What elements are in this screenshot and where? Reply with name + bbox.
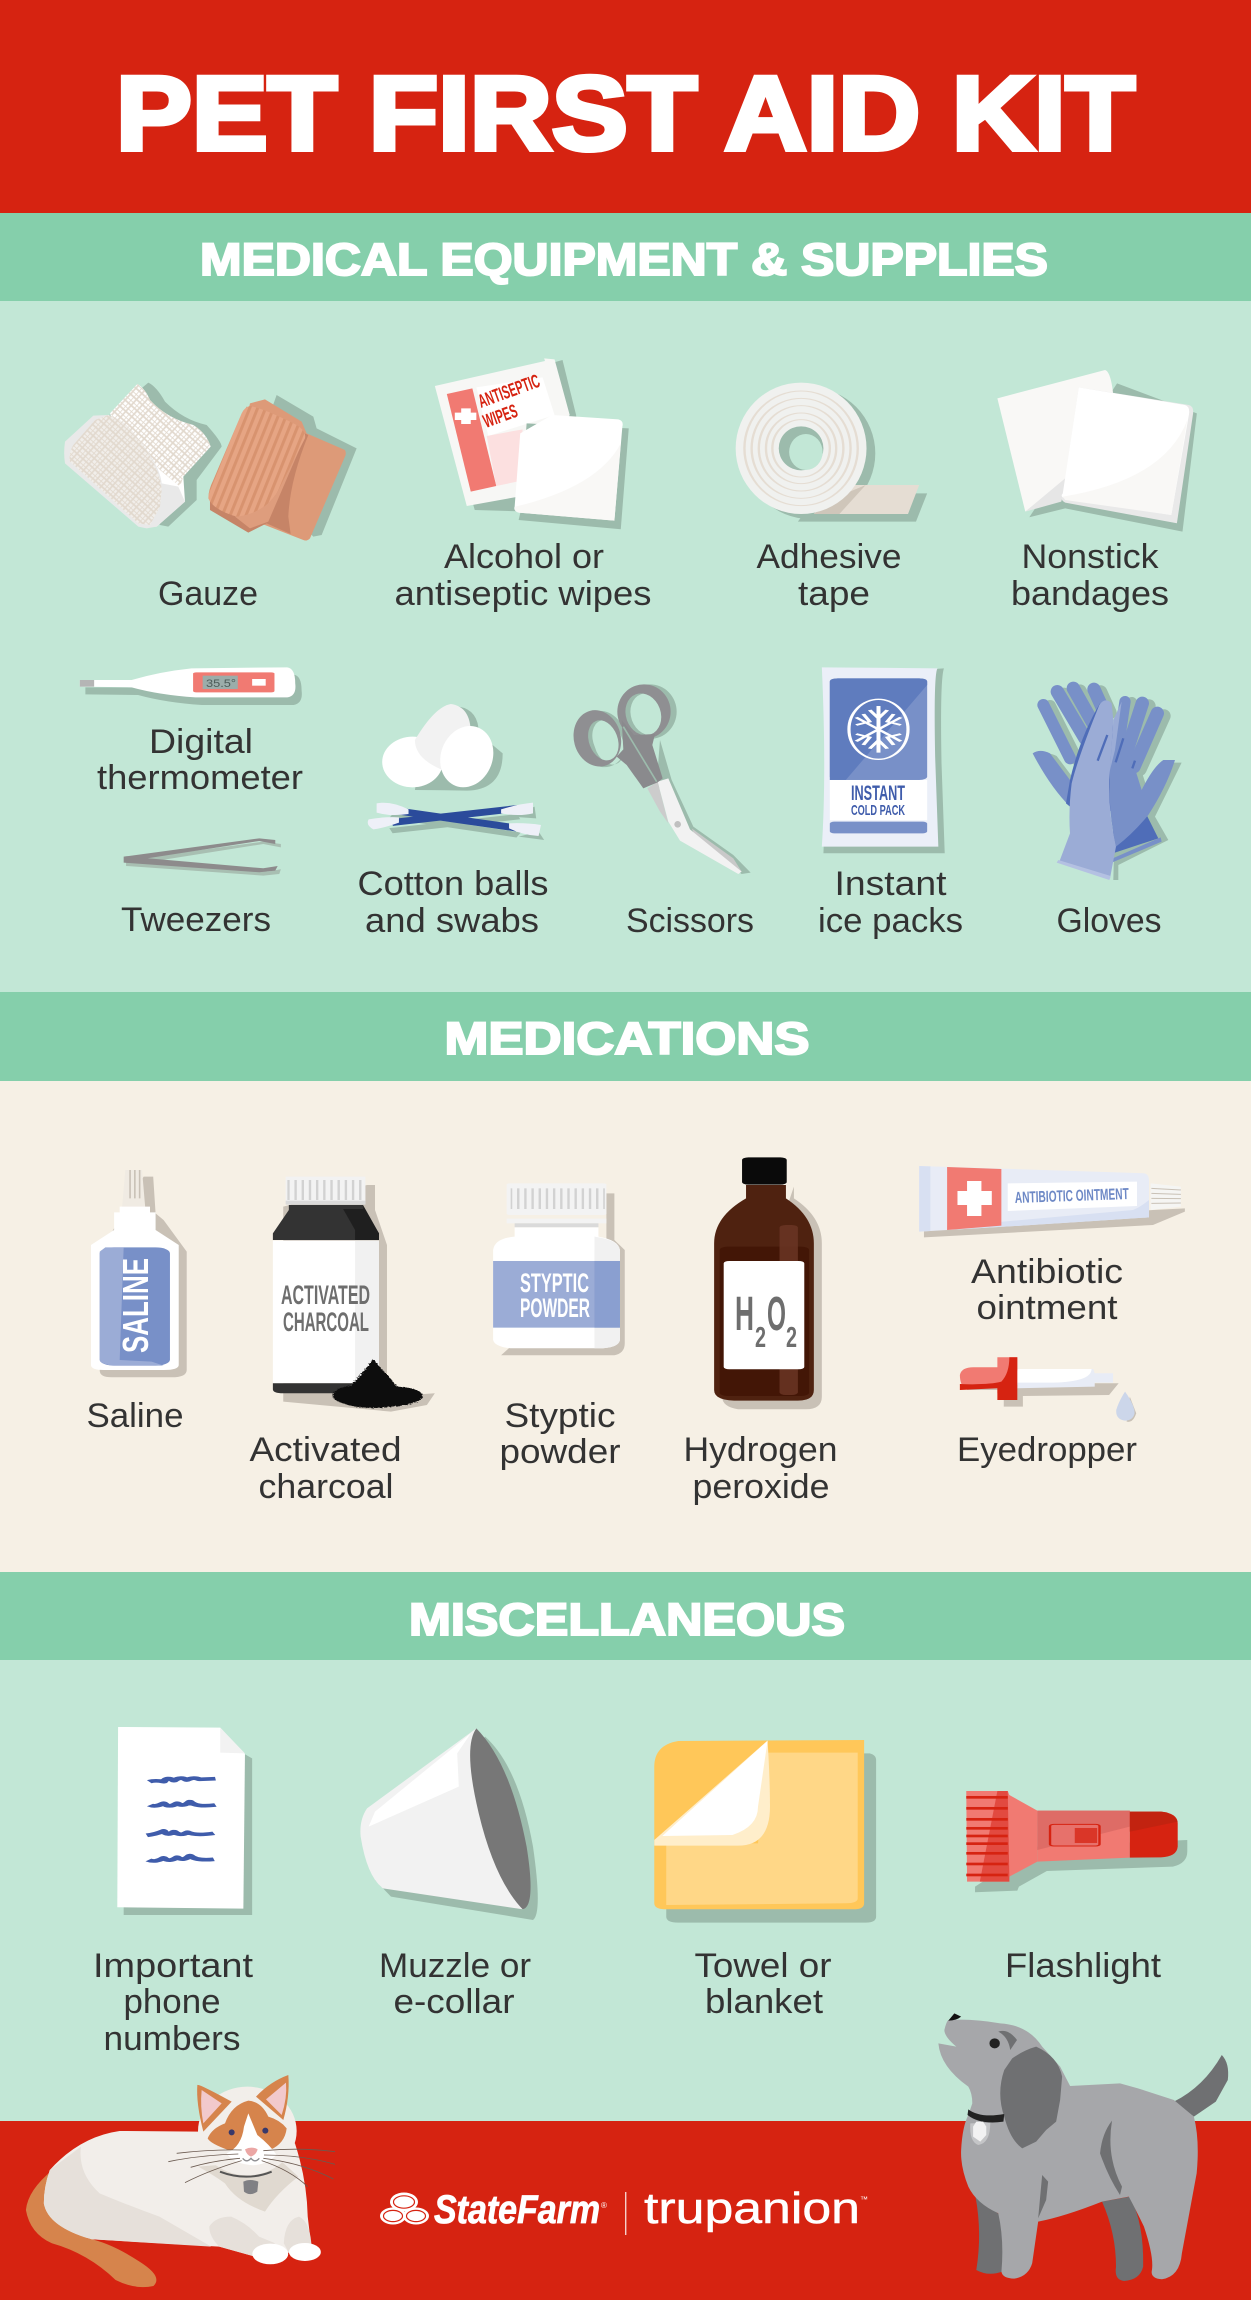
item: antibiotic ointment bbox=[919, 1166, 1185, 1327]
item: nonstick bandages bbox=[997, 370, 1197, 613]
footer banner bbox=[0, 2121, 1251, 2300]
illustration: cat bbox=[26, 2075, 335, 2287]
icon: H2O2 bottle: O bbox=[767, 1288, 786, 1341]
label: Eyedropper bbox=[957, 1431, 1137, 1469]
item: important phone numbers: phone bbox=[124, 1983, 220, 2021]
item: gloves bbox=[1033, 688, 1182, 940]
icon: antiseptic wipes packet bbox=[435, 358, 629, 529]
logo: Trupanion: trupanion bbox=[644, 2184, 860, 2233]
item: adhesive tape bbox=[736, 383, 927, 613]
item: activated charcoal bbox=[250, 1177, 435, 1506]
label: Flashlight bbox=[1005, 1947, 1162, 1985]
logo: State Farm bbox=[380, 2188, 607, 2232]
icon: eyedropper bbox=[960, 1357, 1136, 1422]
header banner bbox=[0, 0, 1251, 213]
icon: cold pack: INSTANT bbox=[851, 782, 905, 805]
item: muzzle or e-collar bbox=[360, 1728, 538, 2021]
icon: charcoal bottle bbox=[273, 1177, 435, 1412]
label: Important bbox=[93, 1947, 254, 1985]
item: cotton balls and swabs bbox=[358, 704, 548, 940]
label: Scissors bbox=[626, 902, 754, 940]
icon: H2O2 bottle: 2 bbox=[755, 1322, 766, 1354]
label: Gloves bbox=[1056, 902, 1162, 940]
item: instant ice packs: ice packs bbox=[818, 902, 963, 940]
logo divider bbox=[625, 2192, 626, 2235]
label: Cotton balls bbox=[358, 865, 548, 903]
item: antibiotic ointment: ointment bbox=[976, 1289, 1118, 1327]
section heading band: medications: MEDICATIONS bbox=[444, 1013, 810, 1064]
icon: bandage squares bbox=[997, 370, 1197, 532]
section heading band: miscellaneous: MISCELLANEOUS bbox=[409, 1594, 845, 1645]
label: Towel or bbox=[694, 1947, 832, 1985]
item: eyedropper bbox=[957, 1357, 1137, 1469]
label: Adhesive bbox=[756, 538, 902, 576]
item: important phone numbers bbox=[93, 1727, 254, 2058]
icon: scissors bbox=[574, 684, 751, 874]
icon: antiseptic wipes packet: WIPES bbox=[481, 401, 521, 433]
item: cotton balls and swabs: and swabs bbox=[365, 902, 539, 940]
section heading band: medical equipment bbox=[0, 213, 1251, 301]
item: hydrogen peroxide bbox=[684, 1157, 838, 1506]
icon: e-collar cone bbox=[360, 1728, 538, 1920]
icon: saline bottle bbox=[91, 1170, 187, 1377]
label: Alcohol or bbox=[444, 538, 604, 576]
icon: document bbox=[117, 1727, 252, 1915]
item: saline bbox=[86, 1170, 187, 1435]
label: Tweezers bbox=[121, 901, 271, 939]
icon: tweezers bbox=[124, 838, 281, 876]
label: Hydrogen bbox=[684, 1431, 838, 1469]
label: Antibiotic bbox=[971, 1253, 1123, 1291]
section heading band: medications bbox=[0, 992, 1251, 1081]
illustration: dog bbox=[938, 2013, 1228, 2281]
item: digital thermometer: thermometer bbox=[97, 759, 303, 797]
label: Instant bbox=[834, 865, 947, 903]
item: styptic powder: powder bbox=[500, 1433, 620, 1471]
icon: cotton balls bbox=[382, 704, 503, 791]
icon: cold pack: COLD PACK bbox=[851, 802, 905, 819]
title: PET FIRST AID KIT bbox=[116, 56, 1135, 172]
icon: gloves bbox=[1033, 688, 1182, 880]
panel: miscellaneous bbox=[0, 1572, 1251, 2122]
panel: medical equipment and supplies bbox=[0, 213, 1251, 992]
label: Activated bbox=[250, 1431, 402, 1469]
item: flashlight bbox=[966, 1791, 1187, 1985]
label: Digital bbox=[149, 723, 253, 761]
label: Styptic bbox=[504, 1397, 616, 1435]
icon: H2O2 bottle bbox=[714, 1157, 822, 1409]
icon: charcoal bottle: CHARCOAL bbox=[283, 1307, 369, 1337]
icon: styptic bottle: POWDER bbox=[520, 1293, 590, 1323]
panel: medications bbox=[0, 992, 1251, 1572]
cat body bbox=[26, 2131, 321, 2287]
item: tweezers bbox=[121, 838, 281, 939]
section heading band: medical equipment: MEDICAL EQUIPMENT & SUPPLIES bbox=[200, 234, 1048, 285]
label: Saline bbox=[86, 1397, 184, 1435]
icon: ointment tube bbox=[919, 1166, 1185, 1237]
item: muzzle or e-collar: e-collar bbox=[394, 1983, 514, 2021]
icon: H2O2 bottle: H bbox=[735, 1288, 754, 1341]
icon: towel bbox=[654, 1740, 876, 1923]
icon: thermometer: 35.5° bbox=[206, 678, 236, 690]
icon: saline bottle: SALINE bbox=[115, 1258, 156, 1353]
item: important phone numbers: numbers bbox=[104, 2020, 240, 2058]
label: Muzzle or bbox=[379, 1947, 531, 1985]
icon: styptic bottle bbox=[493, 1183, 625, 1355]
icon: charcoal bottle: ACTIVATED bbox=[281, 1280, 370, 1310]
icon: gauze rolls bbox=[64, 383, 357, 541]
cat head bbox=[168, 2075, 335, 2212]
label: Gauze bbox=[158, 575, 258, 613]
icon: thermometer bbox=[80, 667, 302, 705]
icon: styptic bottle: STYPTIC bbox=[520, 1268, 589, 1298]
icon: H2O2 bottle: 2 bbox=[786, 1322, 797, 1354]
logo: State Farm: ® bbox=[601, 2201, 607, 2210]
section heading band: miscellaneous bbox=[0, 1572, 1251, 1660]
item: activated charcoal: charcoal bbox=[258, 1468, 394, 1506]
item: wipes bbox=[394, 358, 652, 613]
label: Nonstick bbox=[1022, 538, 1160, 576]
logo: State Farm: StateFarm bbox=[434, 2188, 600, 2232]
item: towel or blanket bbox=[654, 1740, 876, 2021]
logo: Trupanion: ™ bbox=[860, 2195, 868, 2204]
icon: antiseptic wipes packet: ANTISEPTIC bbox=[476, 371, 543, 413]
icon: cotton swabs bbox=[368, 803, 544, 840]
item: towel or blanket: blanket bbox=[705, 1983, 824, 2021]
item: scissors bbox=[574, 684, 754, 940]
item: instant ice packs bbox=[818, 667, 963, 940]
item: wipes: antiseptic wipes bbox=[394, 575, 652, 613]
item: styptic powder bbox=[493, 1183, 625, 1471]
item: gauze bbox=[64, 383, 357, 613]
icon: tape roll bbox=[736, 383, 927, 522]
icon: ointment tube: ANTIBIOTIC OINTMENT bbox=[1015, 1186, 1129, 1207]
item: nonstick bandages: bandages bbox=[1011, 575, 1169, 613]
icon: flashlight bbox=[966, 1791, 1187, 1892]
item: hydrogen peroxide: peroxide bbox=[692, 1468, 830, 1506]
icon: cold pack bbox=[822, 667, 945, 853]
item: digital thermometer bbox=[80, 667, 303, 797]
item: adhesive tape: tape bbox=[798, 575, 870, 613]
